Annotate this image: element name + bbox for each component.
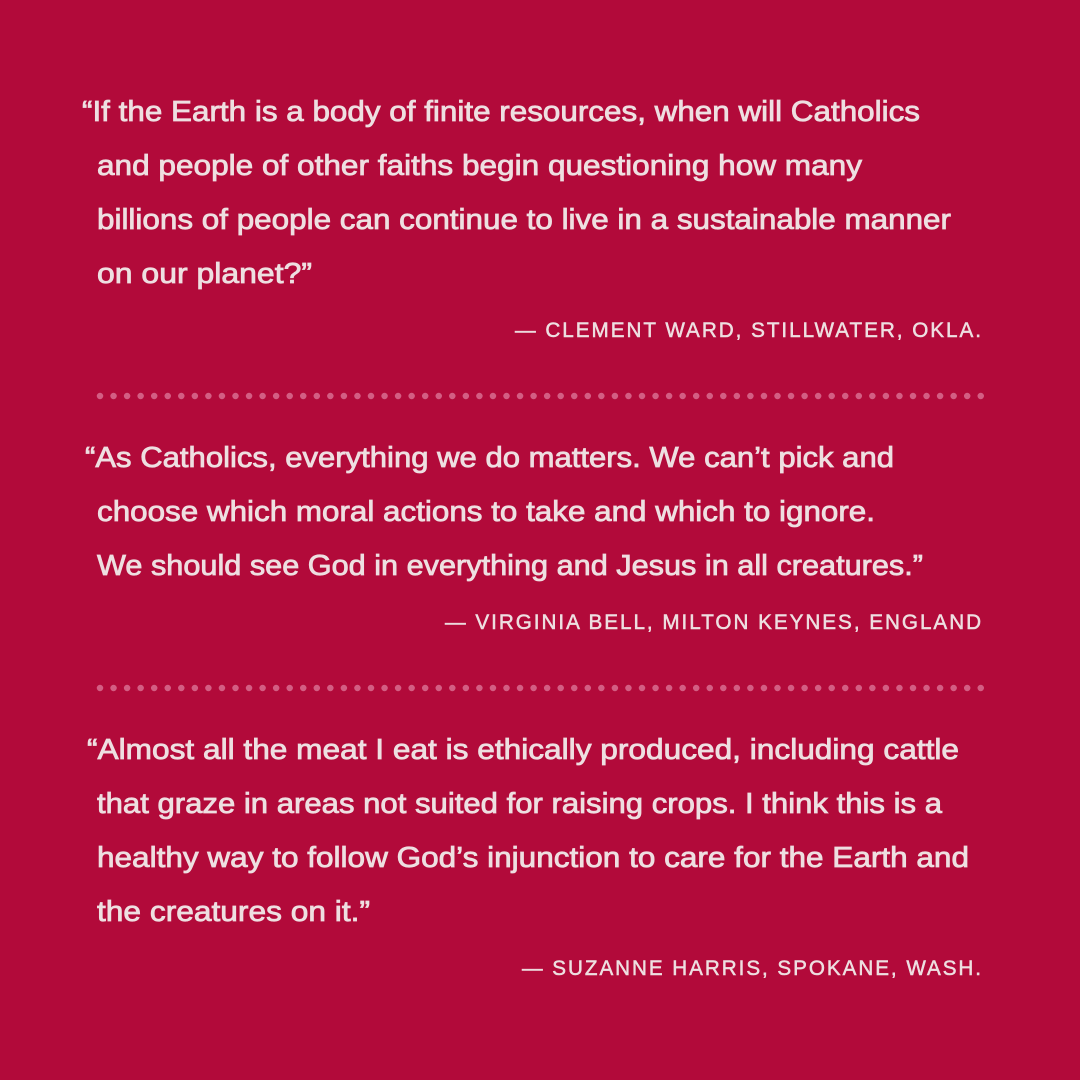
quote 2: choose which moral actions to take and which to ignore. <box>97 496 875 528</box>
attribution 1: — CLEMENT WARD, STILLWATER, OKLA. <box>515 319 983 342</box>
quote 2: We should see God in everything and Jesus in all creatures.” <box>97 550 923 582</box>
quote 3: that graze in areas not suited for raising crops. I think this is a <box>97 788 943 820</box>
quote 3: the creatures on it.” <box>97 896 370 928</box>
attribution 3: — SUZANNE HARRIS, SPOKANE, WASH. <box>522 957 983 980</box>
quote 3: healthy way to follow God’s injunction to care for the Earth and <box>97 842 969 874</box>
quote 1 <box>82 96 951 290</box>
quote 2: “As Catholics, everything we do matters. We can’t pick and <box>85 442 894 474</box>
attribution 2: — VIRGINIA BELL, MILTON KEYNES, ENGLAND <box>445 611 983 634</box>
quote 3 <box>87 734 969 928</box>
quote 1: and people of other faiths begin questioning how many <box>97 150 863 182</box>
quote 1: “If the Earth is a body of finite resources, when will Catholics <box>82 96 920 128</box>
quote 2 <box>85 442 923 582</box>
quote 3: “Almost all the meat I eat is ethically produced, including cattle <box>87 734 959 766</box>
quote 1: billions of people can continue to live in a sustainable manner <box>97 204 951 236</box>
quote 1: on our planet?” <box>97 258 312 290</box>
